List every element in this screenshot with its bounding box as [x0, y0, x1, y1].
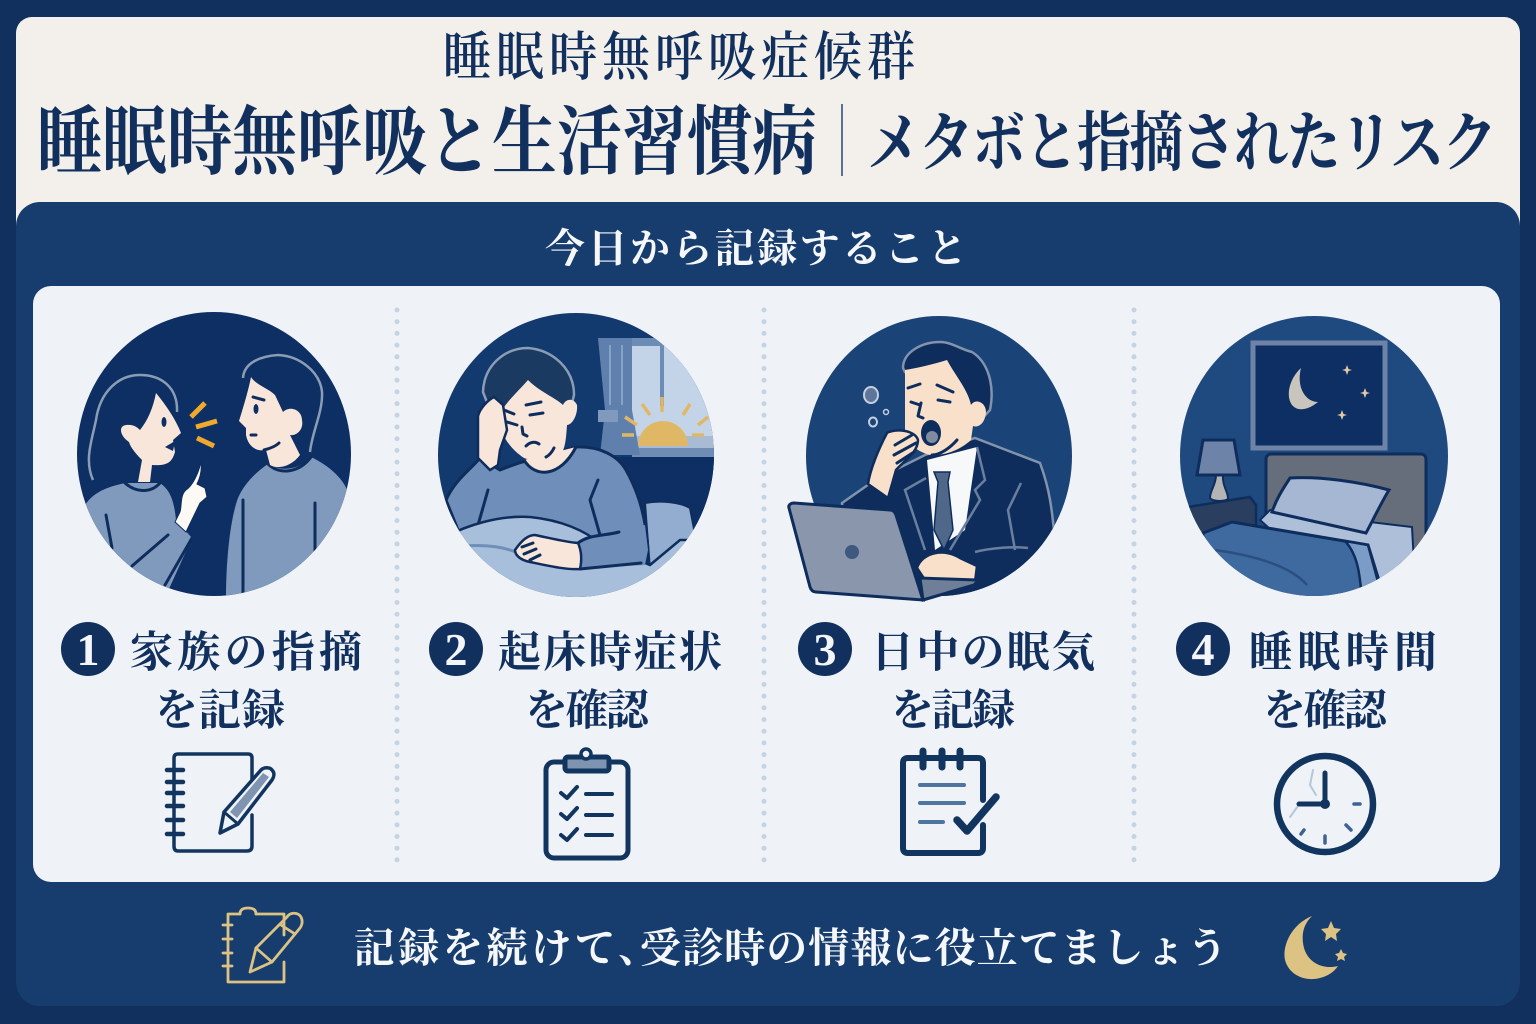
step 1: 1 — [76, 624, 100, 675]
white card — [33, 286, 1500, 882]
nightstand — [1188, 497, 1256, 545]
window with sun — [598, 338, 723, 527]
main title left: 睡眠時無呼吸と生活習慣病 — [37, 102, 817, 185]
step 4 — [1176, 622, 1437, 735]
icon: gold notebook — [223, 908, 302, 982]
suit — [842, 438, 1055, 600]
step 4: を確認 — [1263, 687, 1391, 735]
footer band — [223, 908, 1347, 982]
hand on blanket — [515, 535, 581, 569]
headboard — [1266, 454, 1426, 564]
night window picture — [1253, 343, 1385, 448]
hand on keyboard — [917, 553, 977, 586]
footer message: 記録を続けて、 — [354, 925, 659, 971]
number badge 3 — [798, 622, 852, 676]
step 2: 2 — [444, 624, 468, 675]
lamp — [1197, 440, 1240, 501]
illustration: bedroom at night — [1180, 316, 1448, 596]
step 3 — [798, 622, 1095, 735]
blanket — [1200, 522, 1385, 600]
illustration: daytime sleepiness — [789, 316, 1072, 600]
title divider — [841, 104, 843, 176]
number badge 1 — [61, 622, 115, 676]
yawning man's head — [903, 342, 992, 455]
woman — [85, 375, 207, 600]
blanket — [458, 516, 688, 597]
footer message: 受診時の情報に役立てましょう — [640, 925, 1228, 971]
number badge 4 — [1176, 622, 1230, 676]
step 2 — [429, 622, 723, 735]
step 4: 4 — [1192, 624, 1214, 675]
speech marks — [191, 403, 217, 446]
header panel — [16, 17, 1520, 247]
man — [226, 355, 350, 600]
step 1 label: 家族の指摘 — [130, 629, 362, 677]
bubbles — [864, 387, 888, 426]
illustration: family pointing out — [77, 312, 351, 596]
step 3: を記録 — [891, 687, 1015, 735]
pillow behind — [646, 502, 695, 570]
number badge 2 — [429, 622, 483, 676]
step 2 label: 起床時症状 — [498, 629, 723, 677]
sheet — [1260, 510, 1416, 600]
icon: clock — [1277, 756, 1373, 852]
laptop — [789, 503, 978, 600]
illustration: morning symptoms — [438, 313, 714, 597]
pillow — [1272, 478, 1389, 533]
icon: gold moon and stars — [1284, 916, 1347, 979]
main title right: メタボと指摘されたリスク — [867, 107, 1497, 179]
step 2: を確認 — [525, 687, 653, 735]
column dividers — [397, 310, 1134, 862]
step 1: を記録 — [155, 687, 285, 735]
section heading: 今日から記録すること — [545, 226, 967, 271]
subtitle: 睡眠時無呼吸症候群 — [443, 28, 915, 87]
icon: notepad with check — [903, 751, 996, 853]
sleepy man — [446, 348, 648, 572]
step 3: 3 — [814, 624, 836, 675]
lower sleeve — [578, 525, 648, 569]
icon: notebook and pencil — [167, 754, 274, 851]
step 4 label: 睡眠時間 — [1249, 630, 1437, 677]
icon: clipboard checklist — [546, 749, 628, 858]
hand at mouth — [868, 430, 918, 498]
step 1 — [61, 622, 362, 735]
step 3 label: 日中の眠気 — [871, 629, 1095, 677]
